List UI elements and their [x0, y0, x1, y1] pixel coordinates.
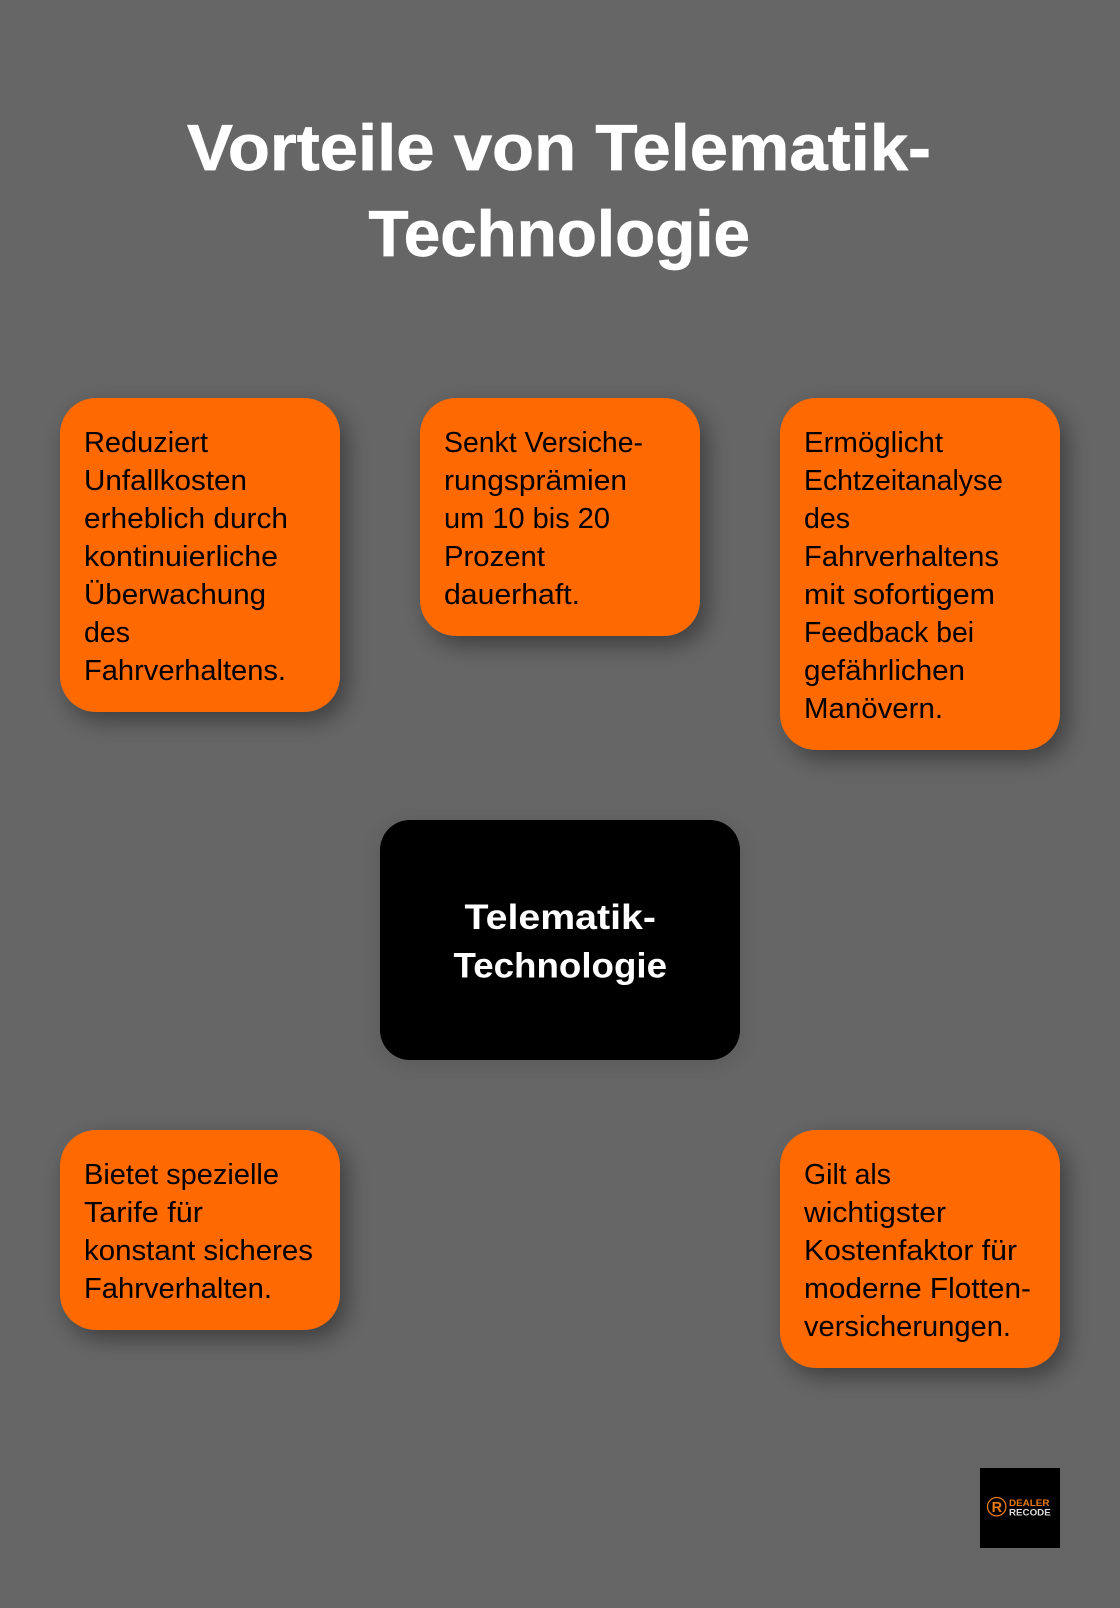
panel: insurance premiums: dauerhaft. — [444, 579, 580, 611]
panel: accident costs: Reduziert — [84, 427, 208, 459]
title: Vorteile von Telematik- — [187, 112, 931, 184]
panel: insurance premiums: Prozent — [444, 541, 545, 573]
panel: special tariffs: Tarife für — [84, 1197, 204, 1229]
panel: central topic: Telematik- — [464, 897, 656, 937]
panel: cost factor — [780, 1130, 1060, 1368]
panel: central topic — [380, 820, 740, 1060]
panel: insurance premiums: Senkt Versiche- — [444, 427, 643, 459]
panel: insurance premiums — [420, 398, 700, 636]
logo: Dealer Recode — [980, 1468, 1060, 1548]
panel: accident costs: erheblich durch — [84, 503, 288, 535]
panel: real-time analysis: des — [804, 503, 850, 535]
panel: cost factor: Kostenfaktor für — [804, 1235, 1018, 1267]
panel: insurance premiums: rungsprämien — [444, 465, 627, 497]
title — [187, 112, 931, 270]
panel: real-time analysis: Echtzeitanalyse — [804, 465, 1003, 497]
panel: special tariffs — [60, 1130, 340, 1330]
panel: special tariffs: Fahrverhalten. — [84, 1273, 272, 1305]
panel: real-time analysis: Feedback bei — [804, 617, 974, 649]
logo: Dealer Recode: R — [992, 1500, 1003, 1516]
panel: accident costs: des — [84, 617, 130, 649]
panel: real-time analysis: Fahrverhaltens — [804, 541, 999, 573]
panel: cost factor: wichtigster — [803, 1197, 947, 1229]
panel: special tariffs: konstant sicheres — [84, 1235, 313, 1267]
panel: real-time analysis: Manövern. — [804, 693, 943, 725]
panel: cost factor: Gilt als — [804, 1159, 891, 1191]
panel: accident costs: Überwachung — [84, 579, 266, 611]
panel: real-time analysis — [780, 398, 1060, 750]
panel: central topic: Technologie — [454, 946, 667, 986]
logo: Dealer Recode: RECODE — [1009, 1508, 1051, 1518]
title: Technologie — [368, 198, 750, 270]
logo: Dealer Recode: DEALER — [1009, 1498, 1050, 1508]
panel: accident costs: kontinuierliche — [84, 541, 278, 573]
panel: real-time analysis: mit sofortigem — [804, 579, 995, 611]
panel: real-time analysis: gefährlichen — [804, 655, 965, 687]
panel: cost factor: moderne Flotten- — [804, 1273, 1031, 1305]
panel: accident costs — [60, 398, 340, 712]
panel: accident costs: Fahrverhaltens. — [84, 655, 286, 687]
panel: special tariffs: Bietet spezielle — [84, 1159, 279, 1191]
panel: cost factor: versicherungen. — [804, 1311, 1011, 1343]
panel: insurance premiums: um 10 bis 20 — [444, 503, 610, 535]
panel: real-time analysis: Ermöglicht — [804, 427, 943, 459]
panel: accident costs: Unfallkosten — [84, 465, 247, 497]
